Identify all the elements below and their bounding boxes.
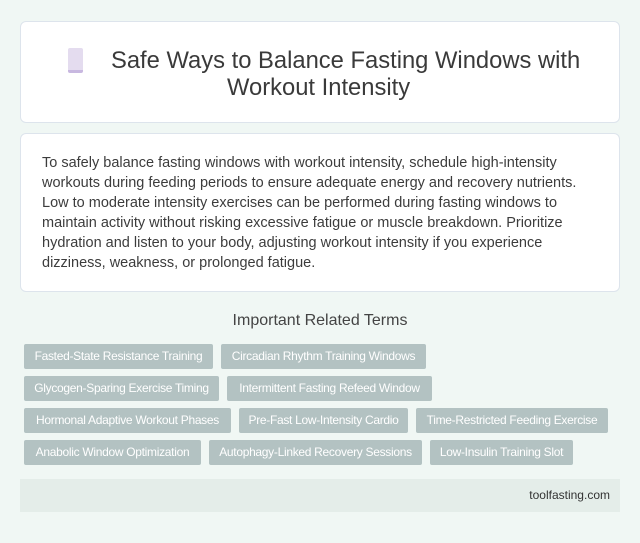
heading: related terms: Important Related Terms (233, 312, 407, 329)
tags: Low-Insulin Training Slot (440, 445, 563, 459)
icon: document (68, 48, 83, 73)
text block: workouts during feeding periods to ensure adequate energy and recovery nutrients. (42, 175, 576, 191)
title (111, 47, 580, 101)
title: Workout Intensity (227, 74, 410, 101)
tags: Autophagy-Linked Recovery Sessions (219, 445, 412, 459)
tags: Hormonal Adaptive Workout Phases (36, 413, 219, 427)
tags: Intermittent Fasting Refeed Window (239, 381, 420, 395)
tags: Fasted-State Resistance Training (35, 349, 202, 363)
panel: title (20, 21, 620, 123)
footer (20, 479, 620, 512)
footer: toolfasting.com (529, 488, 610, 502)
text block (42, 155, 576, 271)
text block: dizziness, weakness, or prolonged fatigue. (42, 255, 315, 271)
tags: Anabolic Window Optimization (36, 445, 189, 459)
title: Safe Ways to Balance Fasting Windows with (111, 47, 580, 74)
panel: description (20, 133, 620, 292)
tags: Pre-Fast Low-Intensity Cardio (248, 413, 399, 427)
tags: Glycogen-Sparing Exercise Timing (34, 381, 209, 395)
tags: Time-Restricted Feeding Exercise (427, 413, 597, 427)
text block: Low to moderate intensity exercises can be performed during fasting windows to (42, 195, 557, 211)
text block: To safely balance fasting windows with workout intensity, schedule high-intensity (42, 155, 557, 171)
text block: hydration and listen to your body, adjusting workout intensity if you experience (42, 235, 542, 251)
tags: Circadian Rhythm Training Windows (232, 349, 415, 363)
text block: maintain activity without risking excessive fatigue or muscle breakdown. Prioritize (42, 215, 563, 231)
